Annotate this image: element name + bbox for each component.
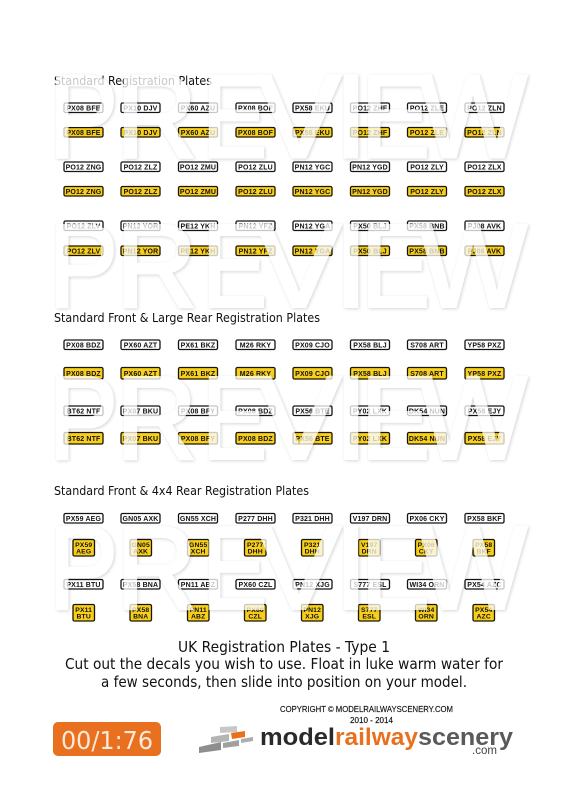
plate row 6 yellow square: PX59	[75, 542, 92, 549]
plate row 4 yellow: PX61 BKZ	[181, 371, 216, 378]
watermark band 4: I	[334, 502, 368, 634]
plate row 1 white: PO12 ZHF	[353, 105, 388, 112]
watermark band 2: R	[116, 200, 197, 332]
plate row 5 white: PX08 BDZ	[238, 408, 273, 415]
plate row 7 yellow square: PX58	[132, 607, 149, 614]
plate row 1 yellow: PO12 ZHF	[353, 130, 388, 137]
panel: standard front and 4x4 rear plates	[64, 514, 504, 621]
plate row 2 white: PO12 ZLU	[238, 164, 273, 171]
plate row 5 white: PX08 BFY	[181, 408, 215, 415]
plate row 6 yellow square: AEG	[76, 548, 91, 556]
logo: model railway scenery	[260, 724, 514, 757]
watermark band 1: I	[334, 51, 368, 183]
plate row 5 white: PY02 LXK	[353, 408, 387, 415]
plate row 3 white: PX50 BLJ	[353, 223, 387, 230]
plate row 7 white: PX58 BNA	[123, 582, 158, 589]
plate row 2 white: PO12 ZNG	[66, 164, 102, 171]
plate row 3 white: PE12 YKH	[181, 223, 215, 230]
plate row 7 white	[64, 580, 504, 589]
heading: standard front and 4x4 rear plates: Standard Front & 4x4 Rear Registration Plates	[54, 484, 309, 498]
panel: standard front and large rear plates	[64, 340, 504, 444]
plate row 4 yellow: PX09 CJO	[295, 371, 330, 378]
plate row 6 yellow square	[73, 540, 494, 556]
plate row 2 white	[64, 162, 504, 172]
watermark band 1: P	[49, 51, 118, 183]
plate row 5 white: PX07 BKU	[123, 408, 158, 415]
plate row 1 yellow: PX58 EKU	[295, 130, 330, 137]
plate row 6 yellow square: PX58	[475, 542, 492, 549]
watermark band 4: R	[116, 502, 197, 634]
plate row 4 yellow: PX08 BDZ	[66, 371, 101, 378]
plate row 4 yellow: PX58 BLJ	[353, 371, 387, 378]
plate row 1 white: PX60 AZU	[181, 105, 215, 112]
watermark band 4: E	[202, 502, 267, 634]
plate row 7 yellow square: PX54	[475, 607, 492, 614]
plate row 6 white: PX06 CKY	[409, 516, 445, 523]
heading: standard registration plates: Standard Registration Plates	[54, 74, 212, 88]
copyright text: 2010 - 2014	[350, 716, 394, 725]
plate row 4 white	[64, 340, 504, 350]
plate row 7 yellow square: ABZ	[191, 614, 205, 620]
plate row 4 white: M26 RKY	[240, 342, 271, 349]
watermark band 2: E	[202, 200, 267, 332]
plate row 1 yellow: PO12 ZLE	[410, 130, 444, 137]
instructions text: a few seconds, then slide into position on your model.	[101, 673, 467, 691]
plate row 5 yellow: PX58 EJY	[468, 436, 501, 443]
plate row 5 white: PX58 EJY	[468, 408, 501, 415]
plate row 7 white: PX11 BTU	[66, 582, 101, 589]
watermark band 3: P	[49, 352, 118, 484]
plate row 5 yellow: PX07 BKU	[123, 436, 158, 443]
plate row 7 yellow square: PX11	[75, 607, 92, 614]
plate row 2 yellow: PO12 ZNG	[66, 189, 102, 196]
watermark band 1	[49, 51, 527, 183]
plate row 6 yellow square: XCH	[191, 548, 206, 556]
plate row 3 white: PX58 BNB	[409, 223, 445, 230]
watermark band 4: W	[419, 502, 527, 634]
copyright text: COPYRIGHT © MODELRAILWAYSCENERY.COM	[280, 705, 453, 714]
heading: standard front and large rear plates: Standard Front & Large Rear Registration Plates	[54, 311, 320, 325]
plate row 3 yellow: PO12 ZLV	[67, 248, 101, 255]
watermark band 2: P	[49, 200, 118, 332]
watermark band 2	[49, 200, 527, 332]
plate row 7 yellow square	[73, 604, 494, 621]
plate row 4 white: PX58 BLJ	[353, 342, 387, 349]
watermark band 3: I	[334, 352, 368, 484]
plate row 5 yellow	[64, 432, 504, 444]
panel: standard registration plates	[64, 103, 504, 256]
plate row 7 yellow square: BNA	[133, 614, 148, 620]
plate row 7 yellow square: S777	[361, 607, 378, 614]
plate row 1 white: PX10 DJV	[124, 105, 158, 112]
plate row 6 white: PX59 AEG	[66, 516, 101, 523]
plate row 4 yellow: M26 RKY	[240, 371, 271, 378]
plate row 5 white: PX56 BTE	[295, 408, 330, 415]
watermark band 1: V	[257, 51, 341, 183]
watermark band 4	[49, 502, 527, 634]
plate row 3 yellow	[64, 246, 504, 256]
watermark: preview bands	[49, 51, 527, 634]
plate row 4 white: S708 ART	[410, 342, 444, 349]
plate row 6 yellow square: CKY	[419, 548, 434, 556]
instructions text	[65, 638, 504, 691]
plate row 3 white: PO12 ZLV	[67, 223, 101, 230]
plate row 1 white: PX08 BFE	[66, 105, 101, 112]
plate row 6 white: P321 DHH	[295, 516, 330, 523]
plate row 2 yellow	[64, 186, 504, 196]
plate row 7 white: PN12 XJG	[295, 582, 330, 589]
plate row 2 white: PO12 ZLX	[467, 164, 502, 171]
instructions text: Cut out the decals you wish to use. Float in luke warm water for	[65, 655, 504, 673]
plate row 6 yellow square: P277	[247, 542, 264, 549]
icon: bricks	[199, 726, 253, 753]
plate row 4 white: YP58 PXZ	[468, 342, 502, 349]
watermark band 2: E	[361, 200, 430, 332]
plate row 4 white: PX60 AZT	[124, 342, 158, 349]
plate row 6 yellow square: P321	[304, 542, 321, 549]
plate row 7 white: PX54 AZC	[467, 582, 502, 589]
plate row 7 yellow square: CZL	[248, 614, 262, 620]
watermark band 4: V	[257, 502, 341, 634]
plate row 4 yellow: S708 ART	[410, 371, 444, 378]
plate row 4 white: PX09 CJO	[295, 342, 330, 349]
plate row 1 yellow: PX60 AZU	[181, 130, 215, 137]
plate row 7 yellow square: PN11	[190, 607, 207, 614]
plate row 2 white: PN12 YGC	[295, 164, 330, 171]
plate row 2 white: PO12 ZLZ	[124, 164, 158, 171]
scale badge: 00/1:76	[61, 726, 153, 755]
plate row 3 white: PN12 YOR	[123, 223, 158, 230]
plate row 1 white: PO12 ZLE	[410, 105, 444, 112]
plate row 3 yellow: PX50 BLJ	[353, 248, 387, 255]
plate row 6 white: V197 DRN	[353, 516, 387, 523]
plate row 6 yellow square: DRN	[362, 548, 377, 556]
watermark band 3	[49, 352, 527, 484]
plate row 7 yellow square: BTU	[76, 614, 91, 620]
plate row 1 white: PX08 BOF	[238, 105, 274, 112]
plate row 1 yellow	[64, 128, 504, 137]
watermark band 1: E	[202, 51, 267, 183]
plate row 5 white	[64, 406, 504, 416]
plate row 6 white: P277 DHH	[238, 516, 273, 523]
watermark band 1: R	[116, 51, 197, 183]
watermark band 4: E	[361, 502, 430, 634]
plate row 2 yellow: PO12 ZLU	[238, 189, 273, 196]
plate row 1 yellow: PX10 DJV	[124, 130, 158, 137]
plate row 2 yellow: PO12 ZLX	[467, 189, 502, 196]
watermark band 3: R	[116, 352, 197, 484]
plate row 4 yellow: PX60 AZT	[124, 371, 158, 378]
plate row 6 yellow square: GN55	[189, 542, 207, 549]
plate row 2 yellow: PO12 ZMU	[180, 189, 216, 196]
plate row 1 yellow: PX08 BFE	[66, 130, 101, 137]
watermark band 2: W	[419, 200, 527, 332]
plate row 6 yellow square: V197	[361, 542, 378, 549]
plate row 1 yellow: PO12 ZLN	[467, 130, 502, 137]
plate row 5 yellow: PY02 LXK	[353, 436, 387, 443]
plate row 2 yellow: PO12 ZLY	[410, 189, 444, 196]
watermark band 3: W	[419, 352, 527, 484]
watermark band 1: W	[419, 51, 527, 183]
plate row 6 white: PX58 BKF	[467, 516, 502, 523]
plate row 6 white	[64, 514, 504, 523]
plate row 5 yellow: PX08 BFY	[181, 436, 215, 443]
plate row 7 yellow square: ESL	[362, 614, 376, 620]
plate row 3 white	[64, 221, 504, 230]
plate row 3 yellow: PX58 BNB	[409, 248, 445, 255]
plate row 6 yellow square: DHH	[305, 548, 320, 556]
plate row 2 yellow: PN12 YGD	[352, 189, 388, 196]
plate row 7 yellow square: ORN	[418, 614, 434, 620]
plate row 7 white: PX60 CZL	[239, 582, 273, 589]
watermark band 4: P	[49, 502, 118, 634]
watermark band 2: V	[257, 200, 341, 332]
logo: model railway scenery: railway	[335, 724, 419, 751]
plate row 7 yellow square: AZC	[476, 614, 491, 620]
plate row 4 yellow: YP58 PXZ	[468, 371, 502, 378]
plate row 2 yellow: PO12 ZLZ	[124, 189, 158, 196]
plate row 2 white: PO12 ZMU	[180, 164, 216, 171]
logo: model railway scenery: model	[260, 724, 335, 751]
plate row 3 white: PN12 YFZ	[239, 223, 273, 230]
plate row 1 white: PX58 EKU	[295, 105, 330, 112]
plate row 7 yellow square: XJG	[305, 614, 319, 620]
plate row 2 white: PN12 YGD	[352, 164, 388, 171]
plate row 5 yellow: BT62 NTF	[67, 436, 101, 443]
plate row 7 yellow square: PX60	[247, 607, 264, 614]
plate row 6 yellow square: GN05	[132, 542, 150, 549]
watermark band 1: E	[361, 51, 430, 183]
plate row 1 yellow: PX08 BOF	[238, 130, 274, 137]
instructions text: UK Registration Plates - Type 1	[178, 638, 390, 656]
watermark band 3: V	[257, 352, 341, 484]
plate row 5 yellow: DK54 NUN	[409, 436, 445, 443]
plate row 3 yellow: PN12 YFZ	[239, 248, 273, 255]
plate row 3 white: PJ08 AVK	[468, 223, 501, 230]
plate row 3 white: PN12 YGA	[295, 223, 330, 230]
plate row 3 yellow: PN12 YOR	[123, 248, 158, 255]
plate row 7 yellow square: PN12	[303, 607, 321, 614]
plate row 5 yellow: PX56 BTE	[295, 436, 330, 443]
plate row 4 white: PX08 BDZ	[66, 342, 101, 349]
watermark band 2: I	[334, 200, 368, 332]
plate row 7 white: PN11 ABZ	[181, 582, 216, 589]
logo: model railway scenery: scenery	[418, 724, 514, 751]
plate row 3 yellow: PN12 YGA	[295, 248, 330, 255]
plate row 7 white: S777 ESL	[353, 582, 387, 589]
plate row 5 yellow: PX08 BDZ	[238, 436, 273, 443]
plate row 1 white	[64, 103, 504, 112]
plate row 6 yellow square: PX06	[418, 542, 435, 549]
plate row 7 white: WI34 ORN	[409, 582, 445, 589]
plate row 3 yellow: PE12 YKH	[181, 248, 215, 255]
plate row 3 yellow: PJ08 AVK	[468, 248, 501, 255]
plate row 5 white: DK54 NUN	[409, 408, 445, 415]
plate row 2 yellow: PN12 YGC	[295, 189, 330, 196]
plate row 7 yellow square: WI34	[418, 607, 434, 614]
watermark band 3: E	[361, 352, 430, 484]
plate row 2 white: PO12 ZLY	[410, 164, 444, 171]
plate row 1 white: PO12 ZLN	[467, 105, 502, 112]
plate row 4 yellow	[64, 368, 504, 379]
copyright text	[280, 705, 453, 725]
plate row 6 yellow square: DHH	[248, 548, 263, 556]
plate row 6 yellow square: AXK	[133, 548, 148, 556]
plate row 5 white: BT62 NTF	[67, 408, 101, 415]
plate row 6 yellow square: BKF	[476, 548, 491, 556]
logo: model railway scenery: .com	[472, 743, 497, 757]
watermark band 3: E	[202, 352, 267, 484]
plate row 4 white: PX61 BKZ	[181, 342, 216, 349]
plate row 6 white: GN05 AXK	[123, 516, 158, 523]
plate row 6 white: GN55 XCH	[180, 516, 216, 523]
